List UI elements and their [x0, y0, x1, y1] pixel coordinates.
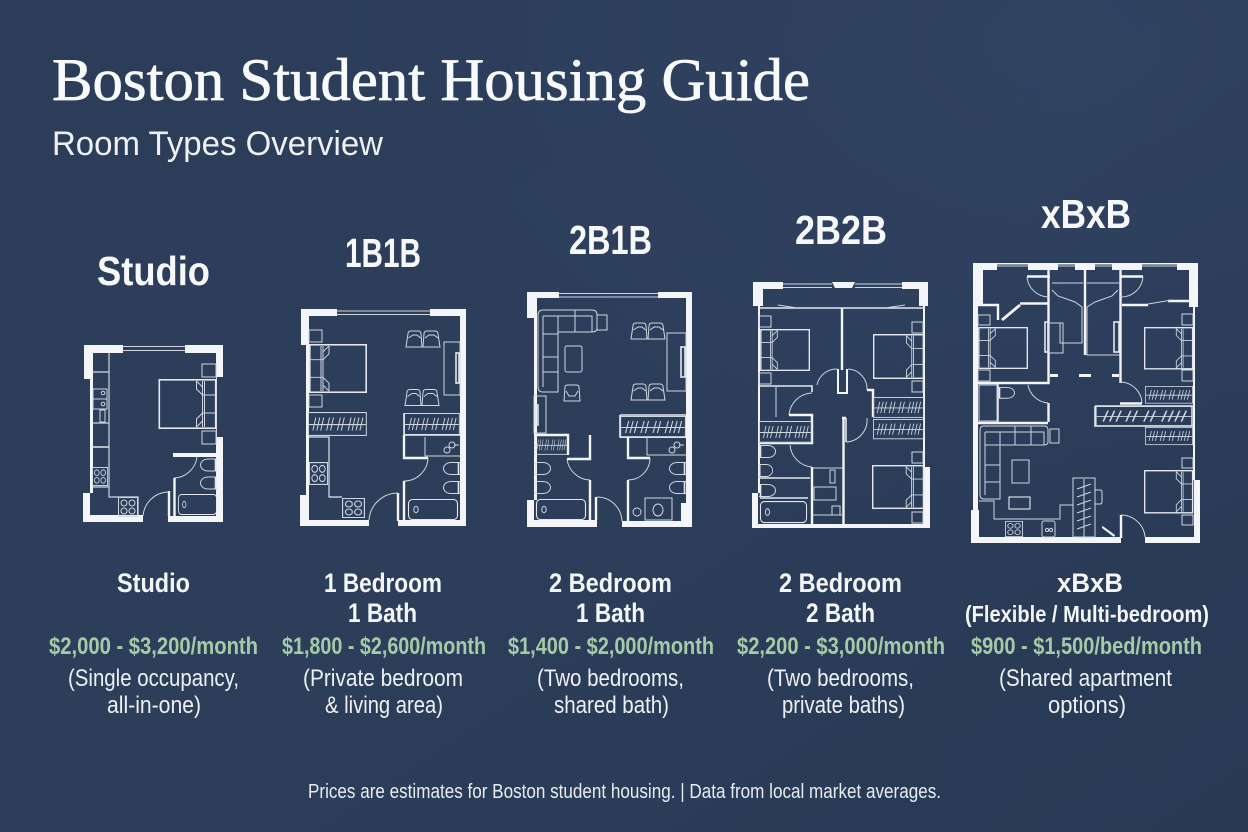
room name: 2 Bedroom — [549, 568, 672, 598]
description — [537, 665, 684, 719]
description — [68, 665, 239, 719]
description: & living area) — [325, 692, 443, 719]
room name: 2 Bedroom — [779, 568, 902, 598]
description — [767, 665, 914, 719]
footer note: Prices are estimates for Boston student housing. | Data from local market averages. — [308, 781, 941, 803]
panel: studio — [83, 248, 223, 522]
caption: 2B2B — [737, 568, 945, 719]
heading: 2B1B: 2B1B — [569, 217, 652, 263]
room name — [779, 568, 902, 628]
description: shared bath) — [554, 692, 669, 719]
caption: xBxB — [965, 568, 1209, 719]
room name: xBxB — [1057, 568, 1123, 598]
room name: 1 Bedroom — [324, 568, 442, 598]
room name — [549, 568, 672, 628]
description — [999, 665, 1172, 719]
room name — [965, 568, 1209, 627]
panel: xBxB — [971, 191, 1200, 543]
heading: 1B1B: 1B1B — [345, 230, 421, 276]
caption: 2B1B — [508, 568, 714, 719]
room name: Studio — [117, 568, 190, 598]
price: $900 - $1,500/bed/month — [971, 633, 1202, 660]
price: $2,200 - $3,000/month — [737, 633, 945, 660]
description: all-in-one) — [107, 692, 201, 719]
floor plan: 2B1B — [527, 292, 692, 527]
panel: 2B1B — [527, 217, 692, 527]
price: $1,800 - $2,600/month — [282, 633, 486, 660]
description: (Two bedrooms, — [537, 665, 684, 692]
description: (Private bedroom — [303, 665, 463, 692]
floor plan: xBxB — [971, 263, 1200, 543]
description: (Two bedrooms, — [767, 665, 914, 692]
heading: studio: Studio — [97, 248, 210, 294]
room name: 2 Bath — [806, 598, 875, 628]
title: Boston Student Housing Guide — [52, 47, 810, 113]
description: private baths) — [782, 692, 905, 719]
room name — [324, 568, 442, 628]
description: (Shared apartment — [999, 665, 1172, 692]
icon: sectional sofa — [538, 310, 607, 392]
description: options) — [1048, 692, 1126, 719]
panel: 1B1B — [300, 230, 466, 526]
caption: 1B1B — [282, 568, 486, 719]
description — [303, 665, 463, 719]
room name: (Flexible / Multi-bedroom) — [965, 601, 1209, 627]
panel: 2B2B — [752, 207, 930, 528]
description: (Single occupancy, — [68, 665, 239, 692]
room name: 1 Bath — [348, 598, 417, 628]
caption: studio — [49, 568, 258, 719]
floor plan: 1B1B — [300, 309, 466, 526]
icon: sectional sofa — [980, 426, 1059, 499]
heading: 2B2B: 2B2B — [795, 207, 887, 253]
price: $1,400 - $2,000/month — [508, 633, 714, 660]
price: $2,000 - $3,200/month — [49, 633, 258, 660]
floor plan: studio — [83, 345, 223, 522]
subtitle: Room Types Overview — [52, 125, 383, 163]
room name: 1 Bath — [576, 598, 645, 628]
heading: xBxB: xBxB — [1041, 191, 1131, 237]
floor plan: 2B2B — [752, 282, 930, 528]
